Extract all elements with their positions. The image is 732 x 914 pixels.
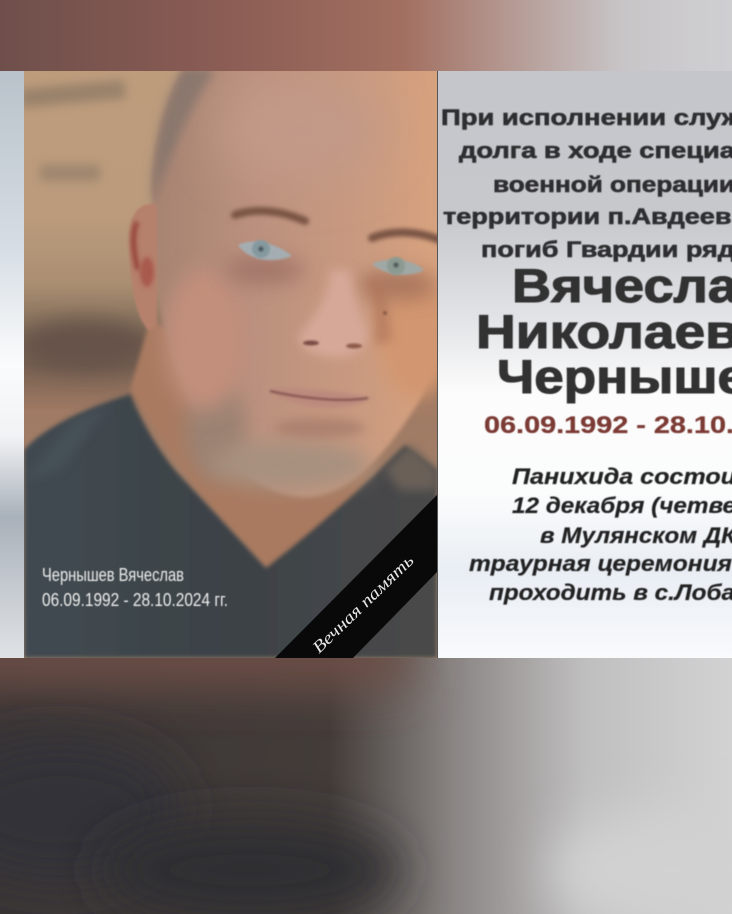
caption name: Чернышев Вячеслав [42,565,184,585]
blurred bottom band [0,658,732,914]
right notice panel [438,71,732,658]
notice intro text: погиб Гвардии ряд [481,237,732,262]
caption dates: 06.09.1992 - 28.10.2024 гг. [42,590,228,610]
left edge strip [0,71,24,658]
photo background landscape [15,71,440,658]
notice intro text: долга в ходе специа [459,138,732,163]
left eye [238,240,292,260]
life dates in red: 06.09.1992 - 28.10. [484,412,732,439]
photo caption [42,565,228,610]
mouth [268,388,372,438]
ribbon text: Вечная память [309,551,418,657]
black mourning ribbon [275,495,437,658]
neck [130,324,343,564]
notice intro text: военной операции [493,172,732,197]
ear [129,204,157,331]
brows [235,211,440,240]
portrait photo panel [15,60,460,658]
notice intro text: При исполнении служ [441,105,732,130]
deceased full name: Вячесла [512,259,732,312]
notice intro text [441,105,732,262]
nose [300,270,392,358]
funeral details text [469,464,732,605]
deceased full name: Черныше [497,350,732,403]
right eye [372,257,424,275]
notice intro text: территории п.Авдеевк [443,204,732,229]
funeral details text: Панихида состои [512,464,732,489]
shirt [24,394,437,658]
funeral details text: 12 декабря (четве [512,493,732,518]
funeral details text: траурная церемония [469,551,732,576]
funeral details text: в Мулянском ДК [540,523,732,548]
funeral details text: проходить в с.Лоба [489,580,732,605]
mole [383,311,387,315]
deceased full name: Николаев [476,305,732,358]
head [152,60,460,497]
deceased full name [476,259,732,403]
blurred top band [0,0,732,71]
